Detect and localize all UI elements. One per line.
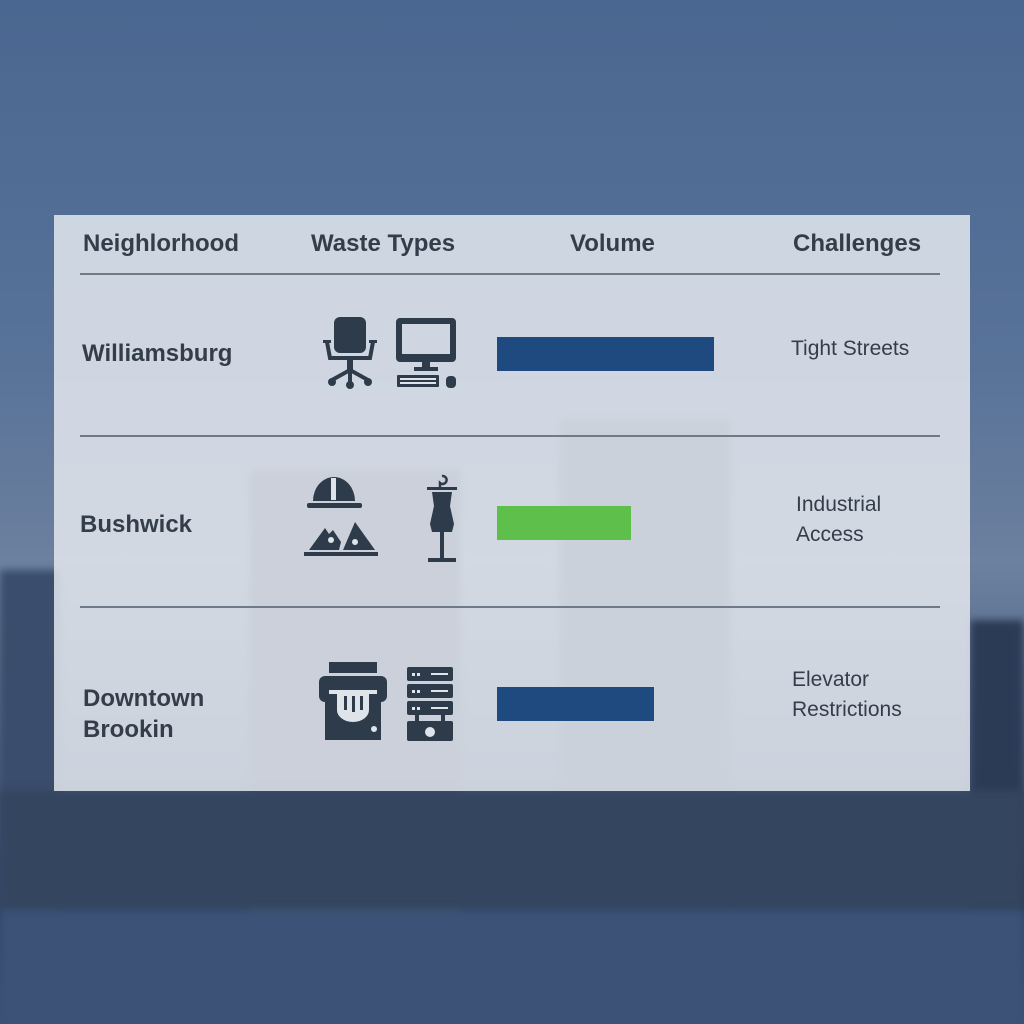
header: Volume: Volume [570,230,655,257]
icon: shredder [319,662,387,740]
row 3 name: Brookin [83,716,174,743]
icon: hard hat [307,477,362,508]
icon: computer [396,318,456,388]
icon: server [407,667,453,741]
row 1 challenge: Tight Streets [791,337,909,360]
row 2 challenge: Industrial [796,493,881,516]
bar: Williamsburg [497,337,714,371]
row 3 name [83,685,204,743]
row 3 name: Downtown [83,685,204,712]
header: Waste Types: Waste Types [311,230,455,257]
icon: office chair [323,317,377,389]
header: Neighborhood: Neighlorhood [83,230,239,257]
row 3 challenge: Elevator [792,668,869,691]
skyline [0,382,1024,972]
row 1 name: Williamsburg [82,340,232,367]
panel [54,215,970,791]
row 2 name: Bushwick [80,511,192,538]
row 2 challenge: Access [796,523,864,546]
header: Challenges: Challenges [793,230,921,257]
icon: dress form [427,474,457,562]
row 3 challenge: Restrictions [792,698,902,721]
icon: rubble [304,522,378,556]
bar: Bushwick [497,506,631,540]
row 2 challenge [796,493,881,546]
bar: Downtown [497,687,654,721]
row 3 challenge [792,668,902,721]
